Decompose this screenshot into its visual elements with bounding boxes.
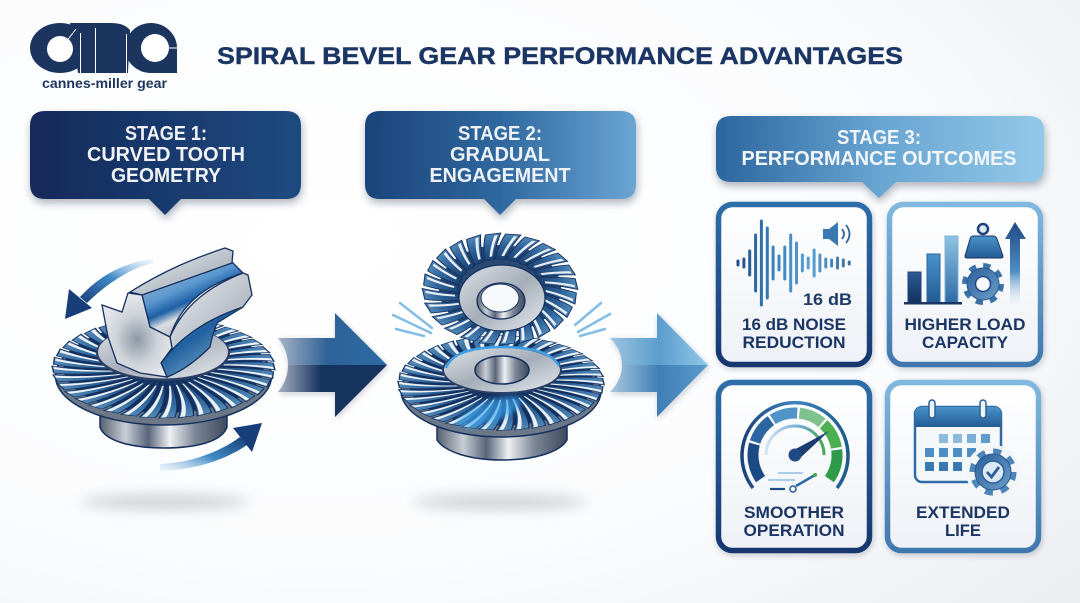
label: [904, 315, 1026, 352]
pinion tooth: top tooth side: [142, 262, 243, 337]
pinion end face: [102, 293, 172, 377]
upper gear: [421, 232, 579, 346]
card: extended life: [888, 382, 1038, 550]
card: smoother operation: [718, 382, 870, 550]
engagement sparks left: [393, 303, 432, 336]
illustration: curved tooth gear: [51, 248, 276, 448]
title: SPIRAL BEVEL GEAR PERFORMANCE ADVANTAGES: [217, 43, 903, 70]
engagement sparks right: [575, 303, 610, 336]
card: higher load capacity: [890, 204, 1040, 364]
value: 16 dB: 16 dB: [803, 290, 852, 309]
card: noise reduction: [718, 204, 870, 364]
panel: stage 2 header: GRADUAL: [450, 144, 550, 166]
label: [742, 315, 846, 352]
panel: stage 3 header: PERFORMANCE OUTCOMES: [742, 148, 1016, 170]
icon: gear with check: [966, 445, 1020, 499]
label: 16 dB NOISE: [742, 315, 846, 334]
icon: calendar: [915, 400, 1001, 482]
label: EXTENDED: [916, 503, 1010, 522]
arrow: rotation bottom: [160, 423, 262, 471]
pinion tooth: second face: [161, 273, 252, 363]
label: LIFE: [945, 521, 981, 540]
panel: stage 2 header: ENGAGEMENT: [430, 165, 570, 187]
icon: sound waveform: [738, 221, 849, 305]
label: SMOOTHER: [744, 503, 844, 522]
panel: stage 1 header: GEOMETRY: [111, 165, 222, 187]
label: HIGHER LOAD: [904, 315, 1026, 334]
shadow under gear 2: [412, 495, 588, 509]
pinion tooth: second side: [161, 307, 243, 377]
icon: gear: [966, 267, 1000, 301]
panel: stage 1 header: CURVED TOOTH: [87, 144, 245, 166]
icon: bar chart: [904, 236, 962, 304]
icon: weight: [965, 224, 1003, 258]
label: [744, 503, 844, 540]
icon: speaker: [823, 222, 850, 246]
panel: stage 3 header: STAGE 3:: [837, 127, 921, 149]
label: OPERATION: [744, 521, 844, 540]
label: REDUCTION: [742, 333, 846, 352]
arrow: stage 1 to stage 2: [278, 313, 387, 417]
label: CAPACITY: [922, 333, 1009, 352]
pinion tooth: top face: [130, 248, 233, 295]
arrow: stage 2 to stage 3: [610, 313, 708, 417]
panel: stage 2 header: STAGE 2:: [458, 123, 542, 145]
icon: up arrow: [1005, 222, 1026, 304]
panel: stage 1 header: [30, 111, 301, 215]
icon: gauge: [742, 403, 848, 492]
arrow: rotation top: [65, 259, 153, 319]
lower gear: [397, 335, 605, 460]
panel: stage 2 header: [365, 111, 636, 215]
panel: stage 1 header: STAGE 1:: [125, 123, 207, 145]
logo: cannes-miller gear: [30, 23, 177, 91]
logo: cannes-miller gear: cannes-miller gear: [42, 75, 168, 91]
shadow under gear 1: [80, 495, 250, 509]
panel: stage 3 header: [716, 116, 1044, 198]
illustration: meshing gears: [393, 232, 610, 460]
label: [916, 503, 1010, 540]
